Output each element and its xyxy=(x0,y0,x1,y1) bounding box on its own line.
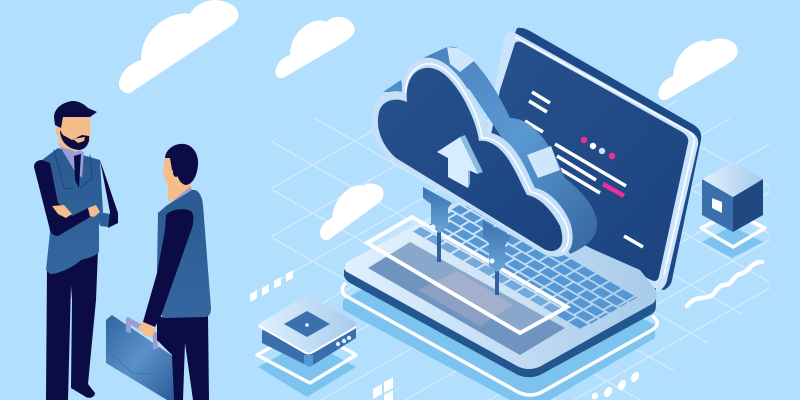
server box xyxy=(257,297,356,397)
isometric grid lines xyxy=(272,100,770,400)
cube white window xyxy=(712,198,722,213)
briefcase handle xyxy=(126,317,158,350)
cloud: top right xyxy=(658,38,738,100)
cube left face xyxy=(702,179,733,232)
cloud: small top centre xyxy=(275,17,355,78)
trousers xyxy=(46,250,98,400)
vest xyxy=(42,148,103,274)
connector right xyxy=(483,221,511,295)
briefcase body xyxy=(106,315,174,400)
beard xyxy=(60,130,89,150)
ear xyxy=(173,167,179,177)
server chip xyxy=(284,311,330,337)
cube device xyxy=(701,162,765,258)
cloud side light band lower xyxy=(527,146,560,178)
laptop xyxy=(344,28,701,377)
cloud: large top left xyxy=(119,0,238,93)
window squares bottom xyxy=(373,377,393,400)
dots bottom right xyxy=(591,370,641,400)
server white edge xyxy=(259,326,356,354)
right sleeve xyxy=(100,160,118,228)
tie xyxy=(74,154,81,188)
connector left xyxy=(423,187,452,262)
cloud side left strip xyxy=(383,80,404,92)
screen pink highlight xyxy=(603,184,624,196)
hair xyxy=(165,144,198,185)
cloud front face xyxy=(378,68,562,251)
hair xyxy=(54,101,97,128)
screen back edge xyxy=(505,28,701,290)
cloud side light band upper xyxy=(447,47,475,72)
small squares left xyxy=(250,270,293,302)
ear and face xyxy=(163,150,178,186)
screen display xyxy=(480,42,688,281)
base dark edge xyxy=(344,265,656,377)
trousers xyxy=(157,315,209,400)
sleeve xyxy=(143,209,193,327)
cloud front rim xyxy=(372,58,573,257)
screen white edge highlight xyxy=(515,37,694,275)
cloud 3D xyxy=(372,47,597,257)
server top xyxy=(258,297,356,352)
trackpad xyxy=(418,271,513,326)
screen bezel xyxy=(480,32,698,293)
squiggle line xyxy=(687,262,762,306)
cube shadow xyxy=(702,226,763,258)
server frame xyxy=(257,327,356,383)
server lights xyxy=(336,336,351,346)
briefcase xyxy=(106,315,174,400)
cloud front white line xyxy=(406,64,568,252)
mouth xyxy=(73,137,85,143)
base top xyxy=(344,195,657,369)
neck xyxy=(168,180,192,202)
selection frame xyxy=(367,217,567,333)
right hand xyxy=(88,205,100,217)
shirt xyxy=(58,143,84,178)
vest xyxy=(157,190,211,318)
cube frame xyxy=(701,212,765,247)
briefcase flap xyxy=(106,348,170,375)
collar xyxy=(165,187,194,210)
right arm cuff xyxy=(99,212,110,227)
server shadow xyxy=(258,340,356,397)
icon: upload arrow xyxy=(437,135,483,188)
touch area xyxy=(368,242,565,355)
server body xyxy=(262,328,356,367)
cloud side xyxy=(423,47,597,254)
cube right face xyxy=(733,179,763,232)
cloud: lower centre xyxy=(320,183,384,240)
server front panel accent xyxy=(304,355,313,367)
left sleeve xyxy=(34,160,90,236)
screen dots xyxy=(581,137,615,159)
person right: man from behind xyxy=(138,144,211,400)
neck xyxy=(60,138,83,152)
hand xyxy=(138,322,155,337)
person left: bearded man xyxy=(34,101,118,400)
face xyxy=(55,117,90,143)
server chip dot xyxy=(305,323,309,327)
lapels xyxy=(54,150,92,189)
screen text lines xyxy=(525,92,643,247)
left hand xyxy=(52,205,72,218)
cube top face xyxy=(702,162,763,197)
laptop shadow and outline xyxy=(342,230,657,400)
keyboard keys xyxy=(417,202,633,327)
